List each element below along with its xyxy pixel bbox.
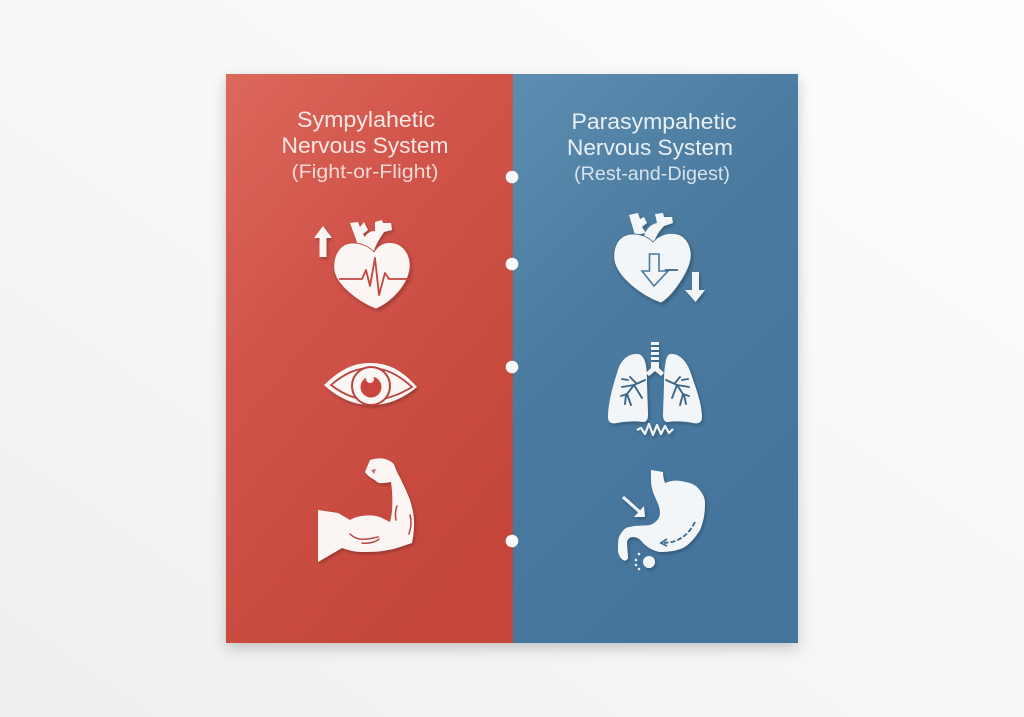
- icon: lungs: [608, 342, 702, 435]
- icon: heart rate up: [314, 220, 410, 309]
- icon: flexed arm muscle: [318, 458, 414, 562]
- heading: parasympathetic: (Rest-and-Digest): [574, 164, 730, 185]
- heading: sympathetic: [282, 107, 448, 183]
- heading: parasympathetic: [567, 109, 736, 185]
- icon: heart rate down: [614, 213, 705, 303]
- icon: eye: [324, 363, 417, 405]
- heading: sympathetic: (Fight-or-Flight): [292, 162, 438, 183]
- panel: parasympathetic nervous system: [513, 74, 798, 643]
- heading: sympathetic: Sympylahetic: [297, 107, 435, 132]
- heading: sympathetic: Nervous System: [282, 133, 448, 158]
- icon: stomach: [618, 470, 705, 570]
- heading: parasympathetic: Parasympahetic: [572, 109, 736, 134]
- connector dots on divider: [506, 171, 518, 547]
- panel: sympathetic nervous system: [226, 74, 798, 643]
- heading: parasympathetic: Nervous System: [567, 135, 733, 160]
